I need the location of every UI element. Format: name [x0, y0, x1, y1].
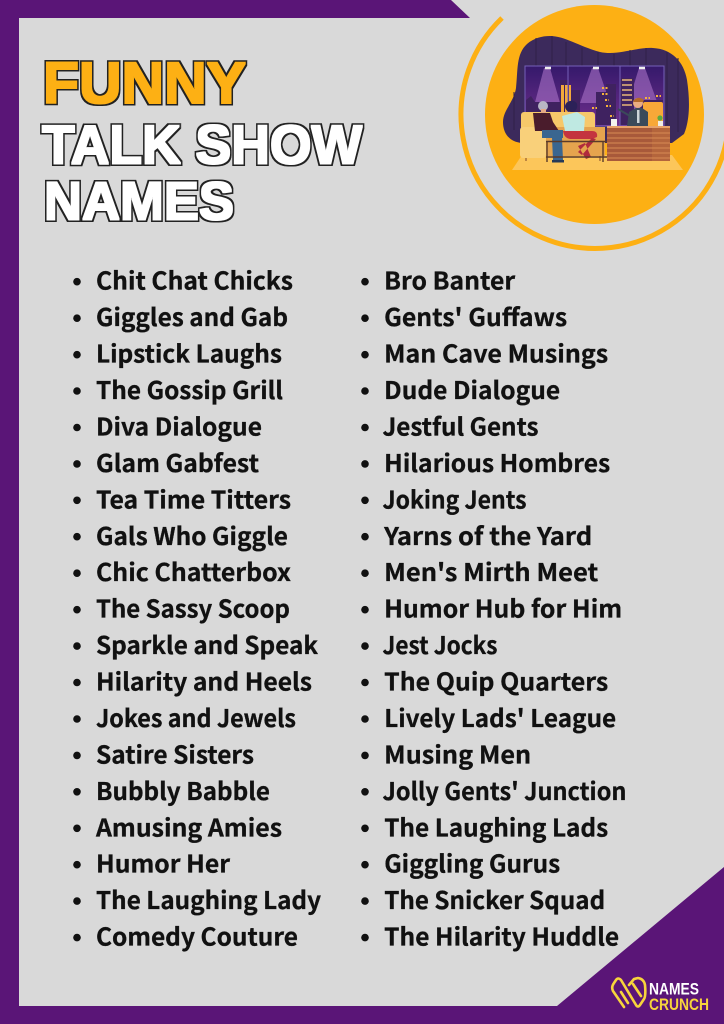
logo text: crunch: CRUNCH: [649, 995, 709, 1014]
names list: left column: Amusing Amies: [95, 809, 282, 844]
names list: right column: Musing Men: [384, 736, 531, 771]
names list: left column: Sparkle and Speak: [96, 627, 318, 662]
names list: right column: Jest Jocks: [382, 627, 498, 662]
sofa: [520, 112, 605, 161]
guest: woman in teal top: [562, 101, 597, 159]
names list: right column: Men's Mirth Meet: [384, 554, 598, 589]
city window: [525, 66, 664, 126]
names list: left column: Lipstick Laughs: [96, 336, 282, 371]
lit towers: [561, 85, 564, 115]
names list: left column: Diva Dialogue: [96, 408, 262, 443]
illustration: talk show set: [503, 36, 689, 170]
names list: right column: Joking Jents: [382, 481, 526, 516]
names list: left column: Gals Who Giggle: [96, 518, 288, 553]
title word: funny: FUNNY: [43, 51, 246, 116]
title line: names: NAMES: [44, 172, 234, 232]
names list: right column: Jolly Gents' Junction: [382, 773, 626, 808]
names list: right column: Bro Banter: [384, 263, 516, 298]
names list: left column: Glam Gabfest: [96, 445, 259, 480]
studio backdrop blob: [503, 36, 689, 143]
names list: left column: Jokes and Jewels: [96, 700, 296, 735]
names list: left column: Satire Sisters: [96, 736, 254, 771]
yellow circle: [485, 5, 704, 224]
coffee table: [546, 141, 608, 162]
names list: right column: Dude Dialogue: [384, 372, 560, 407]
bullet markers: [361, 278, 369, 941]
logo text: names: NAMES: [649, 980, 699, 998]
title line: talk show: TALK SHOW: [42, 114, 362, 176]
windows: [590, 88, 661, 116]
names list: right column: Lively Lads' League: [384, 700, 616, 735]
names list: left column: Tea Time Titters: [96, 481, 291, 516]
host at desk: [618, 98, 663, 127]
names list: right column: The Snicker Squad: [384, 882, 605, 917]
plant and mug: [611, 115, 663, 126]
names list: right column: Man Cave Musings: [384, 336, 608, 371]
title: [42, 51, 362, 232]
names list: right column: Yarns of the Yard: [383, 518, 592, 553]
names list: right column: Jestful Gents: [382, 408, 538, 443]
light cones: [533, 68, 660, 110]
bullet markers: [73, 278, 81, 941]
names list: left column: The Gossip Grill: [96, 372, 283, 407]
names list: left column: The Laughing Lady: [96, 882, 321, 917]
names list: left column: Humor Her: [96, 846, 230, 881]
names list: left column: Giggles and Gab: [96, 299, 288, 334]
names list: left column: Chit Chat Chicks: [96, 263, 293, 298]
backdrop stripes: [514, 36, 678, 132]
names list: right column: The Hilarity Huddle: [384, 919, 619, 954]
logo: names crunch: [612, 978, 709, 1014]
guest: man in dark sweater: [533, 101, 564, 162]
names list: right column: [361, 263, 626, 954]
names list: left column: The Sassy Scoop: [96, 591, 290, 626]
ceiling lights: [545, 67, 645, 69]
names list: left column: Bubbly Babble: [96, 773, 270, 808]
skyline: [526, 78, 663, 126]
ring arc: [461, 18, 724, 248]
names list: right column: Gents' Guffaws: [384, 299, 567, 334]
icon: N mark: [612, 978, 645, 1007]
window mullions: [568, 66, 620, 126]
wooden desk: [607, 126, 670, 161]
names list: left column: Chic Chatterbox: [96, 554, 291, 589]
names list: left column: Hilarity and Heels: [96, 663, 312, 698]
names list: right column: The Quip Quarters: [384, 663, 608, 698]
names list: right column: Giggling Gurus: [384, 846, 560, 881]
names list: left column: [73, 263, 321, 954]
rug: [512, 155, 683, 170]
names list: right column: Humor Hub for Him: [384, 591, 622, 626]
names list: right column: The Laughing Lads: [384, 809, 608, 844]
names list: left column: Comedy Couture: [96, 919, 298, 954]
names list: right column: Hilarious Hombres: [384, 445, 610, 480]
